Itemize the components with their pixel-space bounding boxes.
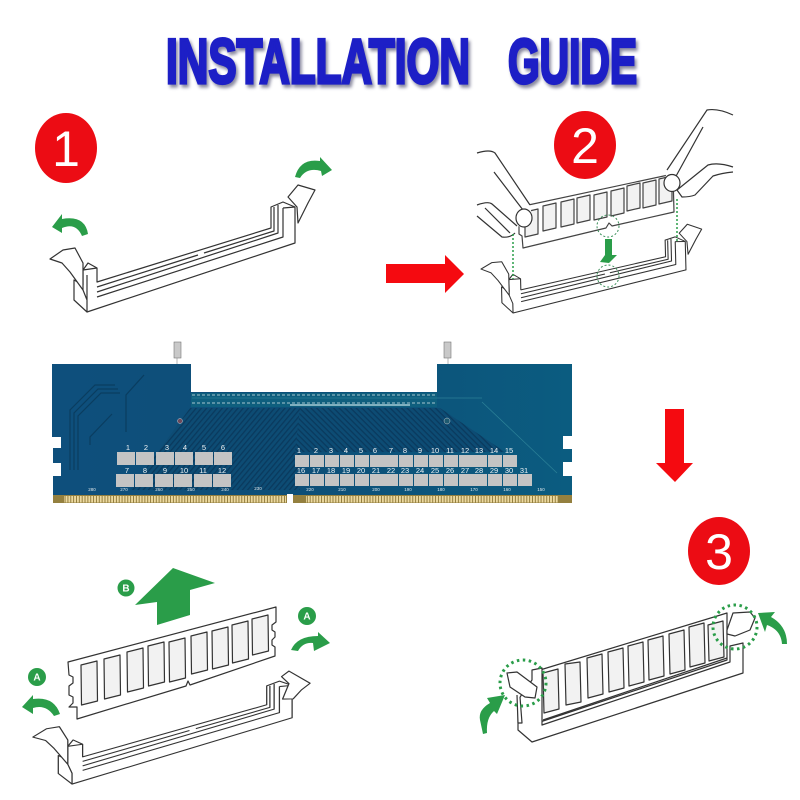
panel: step 3 lock latches bbox=[480, 517, 787, 742]
highlight: right latch bbox=[713, 605, 757, 649]
title: GUIDE bbox=[508, 27, 637, 97]
pad numbers: left block: 7 bbox=[125, 466, 129, 475]
pin index labels: 270 bbox=[120, 487, 128, 492]
arrow: red to step 2 bbox=[386, 255, 464, 293]
badge: step 2: 2 bbox=[571, 118, 599, 174]
pad numbers: right block: 16 bbox=[297, 466, 305, 475]
badge: step 3 bbox=[688, 517, 750, 585]
copper traces bbox=[70, 375, 557, 490]
pad numbers: right block: 29 bbox=[490, 466, 498, 475]
pad numbers: right block: 12 bbox=[461, 446, 469, 455]
pad numbers: left block: 9 bbox=[163, 466, 167, 475]
hand: right bbox=[664, 110, 733, 197]
badge: A left bbox=[28, 668, 46, 686]
panel: step 2 insert module bbox=[477, 110, 733, 326]
slot inner rail bbox=[543, 658, 727, 720]
pin index labels: 170 bbox=[470, 487, 478, 492]
pad numbers: right block: 15 bbox=[505, 446, 513, 455]
pin index labels: 250 bbox=[187, 487, 195, 492]
arrow: left latch opens bbox=[52, 214, 88, 236]
highlight: left latch bbox=[500, 660, 546, 706]
pins above board bbox=[174, 342, 451, 364]
memory slot bbox=[50, 185, 315, 312]
pad numbers: right block: 25 bbox=[431, 466, 439, 475]
pin index labels: 210 bbox=[338, 487, 346, 492]
pad numbers: right block: 26 bbox=[446, 466, 454, 475]
board bbox=[52, 364, 572, 503]
guide lines: green dashed bbox=[513, 199, 677, 287]
pad numbers: right block: 3 bbox=[329, 446, 333, 455]
pad numbers: right block: 17 bbox=[312, 466, 320, 475]
pin index labels bbox=[88, 486, 545, 492]
pin index labels: 200 bbox=[372, 487, 380, 492]
pad numbers: left block: 10 bbox=[180, 466, 188, 475]
badge: A right: A bbox=[303, 612, 311, 622]
arrow: left latch closes bbox=[480, 695, 505, 734]
test pads: right block bbox=[295, 455, 532, 486]
memory module bbox=[540, 613, 727, 722]
arrow: green down bbox=[600, 239, 617, 263]
memory slot bbox=[480, 211, 704, 326]
pin index labels: 190 bbox=[404, 487, 412, 492]
pad numbers: right block: 4 bbox=[344, 446, 348, 455]
pad numbers: right block: 6 bbox=[373, 446, 377, 455]
memory module bbox=[68, 607, 276, 719]
badge: step 1: 1 bbox=[52, 121, 80, 177]
pad numbers: right block: 5 bbox=[359, 446, 363, 455]
pad numbers: left block: 11 bbox=[199, 466, 207, 475]
pad numbers: right block: 27 bbox=[461, 466, 469, 475]
memory slot bbox=[33, 671, 310, 785]
pin index labels: 160 bbox=[503, 487, 511, 492]
gold edge connector bbox=[53, 495, 572, 503]
pad numbers: right block: 8 bbox=[403, 446, 407, 455]
pad numbers: right block: 11 bbox=[446, 446, 454, 455]
badge: B: B bbox=[122, 584, 130, 594]
arrow: left latch opens bbox=[22, 695, 60, 716]
arrow: right latch opens bbox=[291, 632, 330, 651]
latch: right closed bbox=[727, 612, 755, 636]
pad numbers: left block: 5 bbox=[202, 443, 206, 452]
arrow: red down to step 3 bbox=[656, 409, 693, 482]
badge: A right bbox=[298, 607, 316, 625]
title: INSTALLATION bbox=[166, 27, 470, 97]
slot front bbox=[518, 643, 743, 742]
badge: step 1 bbox=[35, 113, 97, 183]
pad numbers: right block: 22 bbox=[387, 466, 395, 475]
pin index labels: 150 bbox=[537, 487, 545, 492]
pad numbers: left block: 1 bbox=[126, 443, 130, 452]
pad numbers: left block bbox=[125, 443, 226, 475]
pad numbers: left block: 12 bbox=[218, 466, 226, 475]
pad numbers: right block: 19 bbox=[342, 466, 350, 475]
panel: adapter board bbox=[52, 342, 572, 503]
pad numbers: right block: 9 bbox=[418, 446, 422, 455]
badge: A left: A bbox=[33, 672, 41, 684]
pin index labels: 260 bbox=[155, 487, 163, 492]
panel: step 1 open slot latches bbox=[35, 113, 332, 312]
latch: left closed bbox=[507, 672, 537, 723]
pad numbers: right block: 30 bbox=[505, 466, 513, 475]
memory module bbox=[519, 174, 674, 248]
pin index labels: 180 bbox=[437, 487, 445, 492]
pad numbers: right block: 1 bbox=[297, 446, 301, 455]
pad numbers: left block: 8 bbox=[143, 466, 147, 475]
pin index labels: 280 bbox=[88, 487, 96, 492]
pad numbers: right block: 7 bbox=[389, 446, 393, 455]
badge: step 3: 3 bbox=[705, 524, 733, 580]
panel: removal bbox=[22, 568, 330, 785]
hand: left bbox=[477, 151, 533, 237]
pad numbers: right block: 21 bbox=[372, 466, 380, 475]
pad numbers: right block: 28 bbox=[475, 466, 483, 475]
pin index labels: 240 bbox=[221, 487, 229, 492]
pad numbers: right block: 23 bbox=[401, 466, 409, 475]
arrow: green lift module bbox=[135, 568, 215, 625]
pad numbers: left block: 4 bbox=[183, 443, 187, 452]
pad numbers: left block: 2 bbox=[144, 443, 148, 452]
pad numbers: right block: 24 bbox=[416, 466, 424, 475]
pad numbers: right block: 20 bbox=[357, 466, 365, 475]
test pads: left block bbox=[116, 452, 232, 487]
arrow: right latch closes bbox=[758, 612, 787, 644]
pad numbers: right block bbox=[297, 446, 528, 475]
pin index labels: 230 bbox=[254, 486, 262, 491]
pad numbers: right block: 31 bbox=[520, 466, 528, 475]
pad numbers: left block: 3 bbox=[165, 443, 169, 452]
pad numbers: right block: 14 bbox=[490, 446, 498, 455]
pad numbers: right block: 10 bbox=[431, 446, 439, 455]
pad numbers: right block: 2 bbox=[314, 446, 318, 455]
pad numbers: right block: 13 bbox=[475, 446, 483, 455]
pad numbers: left block: 6 bbox=[221, 443, 225, 452]
arrow: right latch opens bbox=[295, 157, 332, 178]
pin index labels: 220 bbox=[306, 487, 314, 492]
badge: step 2 bbox=[554, 111, 616, 179]
badge: B bbox=[118, 580, 134, 596]
pad numbers: right block: 18 bbox=[327, 466, 335, 475]
